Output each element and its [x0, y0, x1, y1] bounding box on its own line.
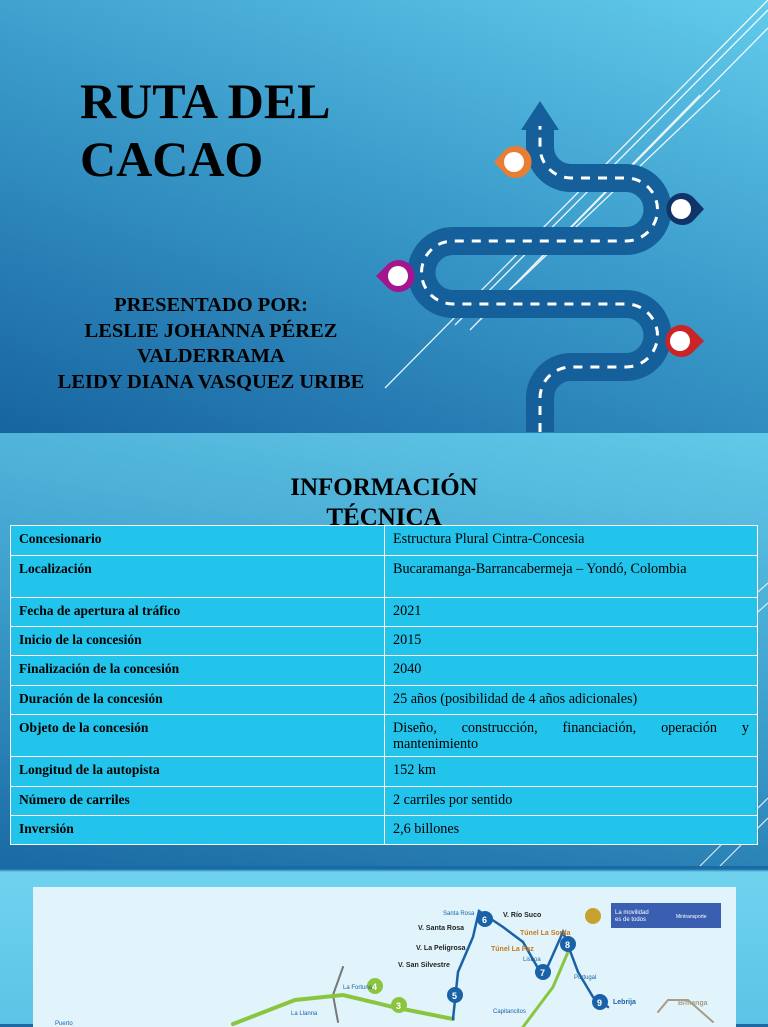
table: technical data: mantenimiento [393, 736, 478, 752]
table: technical data: Concesionario [19, 531, 102, 546]
table: technical data: Inicio de la concesión [19, 632, 142, 647]
map panel: V. San Silvestre [398, 962, 450, 969]
map panel: 5 [452, 991, 457, 1001]
title [80, 73, 331, 187]
slide 1: title slide [0, 0, 768, 433]
pin: orange [494, 146, 532, 178]
title: RUTA DEL [80, 73, 331, 129]
map panel: Puerto [55, 1021, 73, 1027]
pin: red [665, 325, 704, 357]
map panel: 9 [597, 998, 602, 1008]
map panel [33, 887, 736, 1027]
map panel: Santa Rosa [443, 911, 475, 917]
map panel: Túnel La Paz [491, 946, 534, 953]
table: technical data: Bucaramanga-Barrancabermeja – Yondó, Colombia [393, 561, 687, 577]
map panel: V. La Peligrosa [416, 945, 466, 952]
map panel: Túnel La Sorda [520, 930, 571, 937]
table: technical data: 25 años (posibilidad de 4 años adicionales) [393, 691, 637, 707]
map panel: 6 [482, 915, 487, 925]
logo: mintransporte: Mintransporte [676, 914, 707, 920]
map panel: Capitancitos [493, 1009, 526, 1015]
table: technical data: Duración de la concesión [19, 691, 163, 706]
pin: magenta [376, 260, 415, 292]
slide 3: route map [0, 866, 768, 1024]
logo: mintransporte: es de todos [615, 917, 646, 923]
map panel: Portugal [574, 975, 596, 981]
map panel: V. Santa Rosa [418, 925, 464, 932]
map panel: 7 [540, 968, 545, 978]
map panel: La Llanna [291, 1011, 318, 1017]
title: CACAO [80, 131, 263, 187]
table: technical data: 2021 [393, 603, 421, 619]
table: technical data: Número de carriles [19, 792, 130, 807]
table: technical data [10, 525, 758, 845]
logo: mintransporte [585, 903, 721, 928]
illustration: winding road with pins [376, 101, 704, 432]
table: technical data: Finalización de la concesión [19, 661, 179, 676]
table: technical data: 152 km [393, 762, 436, 778]
map panel: 8 [565, 940, 570, 950]
table: technical data: 2040 [393, 661, 421, 677]
pin: navy [666, 193, 704, 225]
map panel: 3 [396, 1001, 401, 1011]
table: technical data: 2015 [393, 632, 421, 648]
map panel: Lebrija [613, 999, 636, 1006]
table: technical data: Estructura Plural Cintra-Concesia [393, 531, 584, 547]
presenters text: LEIDY DIANA VASQUEZ URIBE [58, 370, 364, 392]
map panel: 4 [372, 982, 377, 992]
table: technical data: Localización [19, 561, 92, 576]
heading [290, 473, 478, 531]
table: technical data: 2,6 billones [393, 821, 459, 837]
table: technical data: Inversión [19, 821, 74, 836]
table: technical data: Objeto de la concesión [19, 720, 148, 735]
slide 2: technical information [0, 433, 768, 866]
logo: mintransporte: La movilidad [615, 910, 649, 916]
heading: INFORMACIÓN [290, 474, 478, 501]
presenters text: PRESENTADO POR: [114, 294, 308, 316]
presenters text: VALDERRAMA [137, 345, 285, 367]
map panel: Lisboa [523, 957, 541, 963]
map panel: La Fortuna [343, 985, 373, 991]
presenters text [58, 294, 364, 392]
presenters text: LESLIE JOHANNA PÉREZ [85, 320, 337, 342]
heading: TÉCNICA [326, 504, 442, 531]
map panel: B/manga [678, 1000, 708, 1007]
table: technical data: Longitud de la autopista [19, 762, 160, 777]
table: technical data: Diseño, construcción, financiación, operación y [393, 720, 749, 736]
map panel: V. Río Suco [503, 912, 541, 919]
table: technical data: Fecha de apertura al tráfico [19, 603, 180, 618]
table: technical data: 2 carriles por sentido [393, 792, 512, 808]
